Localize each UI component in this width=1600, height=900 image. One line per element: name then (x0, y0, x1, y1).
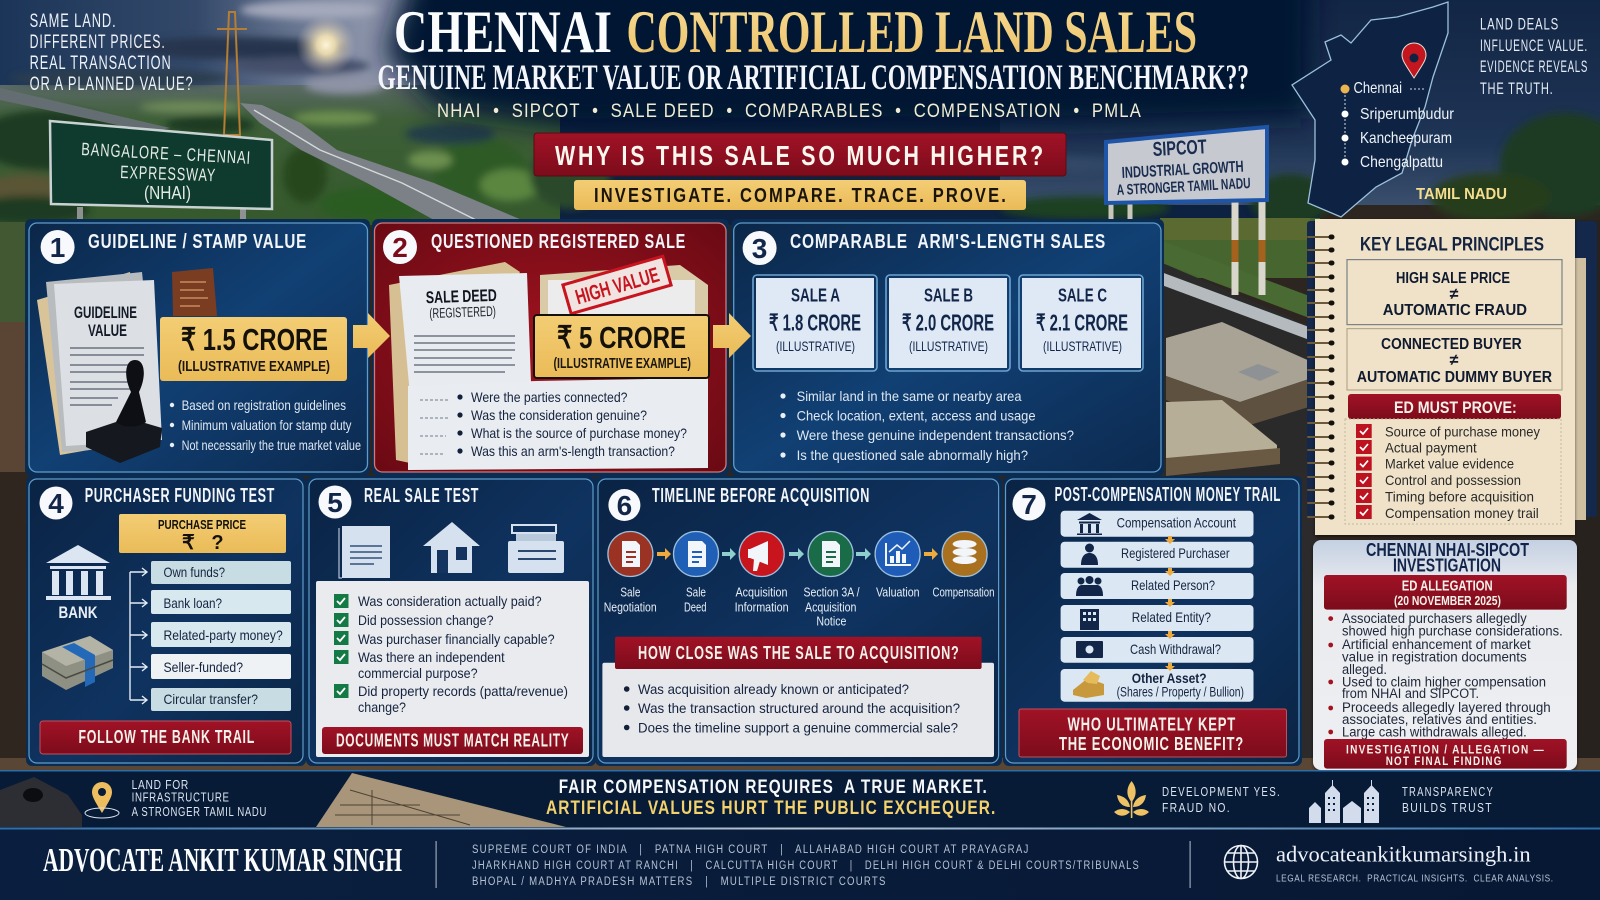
SIPCOT sign: INDUSTRIAL GROWTH (1121, 159, 1244, 182)
number badge 6 (608, 489, 640, 521)
back sheets (389, 262, 520, 463)
economic benefit banner (1019, 709, 1286, 757)
map labels: Chengalpattu (1360, 154, 1443, 171)
footer divider line (0, 828, 1600, 830)
advocate name: ADVOCATE ANKIT KUMAR SINGH (43, 842, 402, 879)
map labels (1354, 80, 1455, 171)
bullet list 1: Based on registration guidelines (182, 397, 346, 413)
map pin (1402, 43, 1426, 78)
purchase price box: PURCHASE PRICE (158, 517, 246, 532)
allegation bullets: Proceeds allegedly layered through (1342, 700, 1551, 715)
icon: leaf sprig (1114, 781, 1149, 818)
card sale B: (ILLUSTRATIVE) (909, 338, 988, 354)
documents must match reality banner: DOCUMENTS MUST MATCH REALITY (336, 731, 569, 751)
timeline labels: Information (735, 600, 789, 615)
question sheet: What is the source of purchase money? (471, 425, 687, 441)
SIPCOT sign: A STRONGER TAMIL NADU (1116, 175, 1251, 199)
expressway road sign: EXPRESSWAY (120, 162, 216, 185)
panel 4: purchaser funding test (26, 476, 306, 766)
number badge 1: 1 (50, 232, 65, 263)
allegation bullets (1328, 611, 1563, 739)
court list (472, 844, 1140, 888)
follow the bank trail banner: FOLLOW THE BANK TRAIL (78, 727, 255, 747)
red question banner: WHY IS THIS SALE SO MUCH HIGHER? (555, 140, 1046, 171)
allegation bullets: alleged. (1342, 662, 1387, 677)
ED allegation banner: (20 NOVEMBER 2025) (1394, 593, 1501, 608)
how close banner: HOW CLOSE WAS THE SALE TO ACQUISITION? (638, 643, 960, 663)
icon: bank (46, 545, 111, 622)
top-right tagline: THE TRUTH. (1480, 79, 1554, 98)
follow the bank trail banner (40, 721, 291, 754)
funding options (151, 561, 291, 711)
court list: JHARKHAND HIGH COURT AT RANCHI | CALCUTTA HIGH COURT | DELHI HIGH COURT & DELHI COURTS/TRIBUNALS (472, 860, 1140, 872)
sale deed document (399, 273, 531, 395)
economic benefit banner: WHO ULTIMATELY KEPT (1068, 715, 1236, 735)
top-left tagline: REAL TRANSACTION (30, 53, 172, 74)
topic strip: NHAI • SIPCOT • SALE DEED • COMPARABLES • COMPENSATION • PMLA (437, 101, 1142, 122)
panel 5: real sale test (306, 476, 596, 766)
funding branch connector (130, 568, 147, 704)
icon: document (339, 526, 390, 578)
high value stamp (563, 256, 671, 314)
principle 1: HIGH SALE PRICE (1396, 270, 1510, 287)
panel: Chennai NHAI-SIPCOT investigation (1313, 540, 1577, 770)
icon: city skyline (1309, 780, 1379, 823)
trail labels: Related Entity? (1132, 609, 1211, 625)
icon: house (423, 522, 480, 573)
card sale C (1019, 275, 1143, 371)
fair compensation statement: FAIR COMPENSATION REQUIRES A TRUE MARKET. (559, 777, 988, 798)
timeline icons (622, 540, 977, 571)
court list: BHOPAL / MADHYA PRADESH MATTERS | MULTIPLE DISTRICT COURTS (472, 876, 887, 888)
number badge 4 (40, 486, 72, 520)
ED proof checklist: Source of purchase money (1385, 423, 1540, 439)
panel 7: post-compensation money trail (1003, 476, 1302, 766)
website: advocateankitkumarsingh.in (1276, 842, 1531, 867)
SIPCOT sign: SIPCOT (1152, 136, 1207, 161)
investigation heading (1366, 540, 1529, 575)
not final finding banner (1324, 739, 1567, 769)
principle 2 (1347, 329, 1562, 390)
barrier rail (1160, 278, 1316, 336)
land for infrastructure text: A STRONGER TAMIL NADU (132, 805, 267, 819)
gold value box 5 crore: (ILLUSTRATIVE EXAMPLE) (554, 355, 691, 372)
panel 3: comparable sales (731, 219, 1164, 476)
left and right gutter scenery (0, 222, 30, 322)
card sale A: ₹ 1.8 CRORE (769, 310, 861, 336)
card sale C: SALE C (1058, 286, 1107, 306)
trail labels: (Shares / Property / Bullion) (1117, 684, 1244, 700)
ED allegation banner: ED ALLEGATION (1402, 579, 1493, 595)
card sale C: (ILLUSTRATIVE) (1043, 338, 1122, 354)
heading 3: COMPARABLE ARM'S-LENGTH SALES (790, 231, 1106, 253)
top-left tagline (30, 11, 194, 95)
timeline circles (608, 532, 987, 576)
not final finding banner: NOT FINAL FINDING (1386, 754, 1503, 768)
timeline labels: Valuation (876, 585, 920, 600)
high value stamp: HIGH VALUE (573, 264, 662, 309)
allegation bullets: Used to claim higher compensation (1342, 674, 1546, 689)
how close banner (615, 637, 982, 669)
checklist sheet: Was consideration actually paid? (358, 593, 542, 609)
trail labels: Other Asset? (1132, 670, 1207, 686)
guideline value document stack: GUIDELINE (74, 303, 137, 322)
transparency text: TRANSPARENCY (1402, 784, 1494, 799)
funding options: Bank loan? (164, 595, 222, 611)
Tamil Nadu map (1292, 2, 1507, 217)
timeline labels: Acquisition (736, 585, 788, 600)
footer branding band (0, 830, 1600, 900)
top-left tagline: SAME LAND. (30, 11, 117, 32)
principle 1 (1347, 260, 1562, 325)
investigation heading: CHENNAI NHAI-SIPCOT (1366, 540, 1529, 560)
header title: CONTROLLED LAND SALES (626, 0, 1197, 65)
sale deed document: SALE DEED (425, 286, 497, 307)
ED proof checklist: Compensation money trail (1385, 505, 1539, 521)
principle 2: CONNECTED BUYER (1381, 336, 1522, 353)
icon: cash stacks (42, 636, 113, 690)
bullet list 1: Minimum valuation for stamp duty (182, 417, 352, 433)
court list: SUPREME COURT OF INDIA | PATNA HIGH COURT | ALLAHABAD HIGH COURT AT PRAYAGRAJ (472, 844, 1030, 856)
funding options: Circular transfer? (164, 691, 258, 707)
ED proof checklist (1345, 419, 1561, 524)
question sheet: Were the parties connected? (471, 389, 628, 405)
notebook: key legal principles (1307, 219, 1597, 535)
checklist sheet: Did possession change? (358, 612, 494, 628)
trail down arrows (1165, 536, 1175, 671)
icon: globe (1224, 846, 1258, 878)
sign posts (1235, 200, 1262, 295)
ED allegation banner (1324, 575, 1567, 610)
trail labels (1117, 515, 1244, 700)
top-left tagline: DIFFERENT PRICES. (30, 32, 166, 53)
bullet list 1: Not necessarily the true market value (182, 437, 361, 453)
pylon tower (217, 12, 247, 135)
expressway road sign (50, 121, 272, 220)
heading 2: QUESTIONED REGISTERED SALE (431, 231, 686, 253)
top-right tagline (1480, 14, 1588, 98)
transparency text (1402, 784, 1494, 815)
acquisition questions sheet: Was the transaction structured around the acquisition? (638, 700, 960, 716)
SIPCOT sign (1106, 127, 1267, 222)
expressway road sign: BANGALORE – CHENNAI (81, 139, 252, 168)
camera-like desk object (0, 777, 82, 827)
land for infrastructure text (132, 778, 267, 819)
fair compensation statement (546, 777, 996, 819)
card sale B (886, 275, 1010, 371)
expressway road sign: (NHAI) (144, 183, 191, 203)
heading 7: POST-COMPENSATION MONEY TRAIL (1055, 484, 1281, 506)
allegation bullets: showed high purchase considerations. (1342, 624, 1563, 639)
bullet list 3 (780, 388, 1074, 463)
card sale A: SALE A (791, 286, 840, 306)
economic benefit banner: THE ECONOMIC BENEFIT? (1059, 734, 1244, 754)
icon: records box (508, 525, 564, 573)
ED proof checklist: Market value evidence (1385, 456, 1514, 472)
development text (1162, 784, 1281, 815)
timeline labels: Sale (620, 585, 640, 600)
ED proof checklist: Actual payment (1385, 440, 1477, 456)
rubber stamp (86, 360, 162, 463)
survey map sheet (316, 773, 566, 827)
trail labels: Cash Withdrawal? (1130, 641, 1221, 657)
bullet list 3: Were these genuine independent transactions? (797, 427, 1074, 443)
dark header haze (385, 0, 1310, 128)
checklist sheet: Was purchaser financially capable? (358, 631, 555, 647)
guideline value document stack: VALUE (88, 321, 127, 340)
trail labels: Registered Purchaser (1121, 545, 1230, 561)
acquisition questions sheet (602, 663, 994, 757)
land for infrastructure text: INFRASTRUCTURE (132, 791, 230, 805)
trail labels: Related Person? (1131, 577, 1215, 593)
not final finding banner: INVESTIGATION / ALLEGATION — (1346, 743, 1545, 757)
notebook heading: KEY LEGAL PRINCIPLES (1360, 235, 1544, 256)
right deed sheet (548, 280, 695, 322)
checklist sheet (316, 581, 589, 757)
checklist sheet: commercial purpose? (358, 665, 478, 681)
gold value box 5 crore (534, 315, 709, 378)
ED must prove banner: ED MUST PROVE: (1394, 398, 1517, 417)
header title: CHENNAI (394, 0, 612, 65)
gold value box 1.5 crore: ₹ 1.5 CRORE (181, 322, 328, 357)
timeline labels: Deed (684, 600, 706, 615)
timeline labels: Acquisition (805, 600, 856, 615)
card sale A: (ILLUSTRATIVE) (776, 338, 855, 354)
development text: FRAUD NO. (1162, 800, 1231, 815)
Tamil Nadu map: TAMIL NADU (1416, 186, 1507, 203)
number badge 5: 5 (327, 487, 343, 518)
development text: DEVELOPMENT YES. (1162, 784, 1281, 799)
top-left tagline: OR A PLANNED VALUE? (30, 74, 194, 95)
gold action banner: INVESTIGATE. COMPARE. TRACE. PROVE. (594, 185, 1008, 207)
number badge 6: 6 (617, 490, 632, 521)
panel 6: timeline before acquisition (595, 476, 1002, 766)
checklist sheet: Was there an independent (358, 649, 505, 665)
purchase price box: ₹ ? (182, 532, 224, 554)
bullet list 3: Check location, extent, access and usage (797, 408, 1036, 424)
documents must match reality banner (322, 727, 583, 754)
timeline labels: Notice (816, 614, 846, 629)
principle 1: AUTOMATIC FRAUD (1383, 302, 1527, 319)
number badge 3: 3 (752, 233, 767, 264)
number badge 2: 2 (392, 232, 408, 263)
checklist sheet: change? (358, 699, 406, 715)
trail icons (1073, 513, 1104, 698)
footer message strip (0, 770, 1600, 828)
timeline labels: Section 3A / (804, 585, 860, 600)
land for infrastructure text: LAND FOR (132, 778, 189, 792)
allegation bullets: associates, relatives and entities. (1342, 712, 1537, 727)
number badge 2 (383, 230, 417, 264)
bullet list 3: Similar land in the same or nearby area (797, 388, 1022, 404)
fair compensation statement: ARTIFICIAL VALUES HURT THE PUBLIC EXCHEQUER. (546, 798, 996, 819)
timeline labels: Compensation (932, 585, 994, 600)
number badge 7: 7 (1021, 489, 1037, 520)
map labels: Kancheepuram (1360, 130, 1452, 147)
heading 5: REAL SALE TEST (364, 485, 479, 507)
website (1276, 842, 1554, 885)
arrow from panel 1 to panel 2 (353, 313, 390, 358)
principle 1: ≠ (1450, 286, 1459, 303)
acquisition questions sheet: Does the timeline support a genuine commercial sale? (638, 720, 958, 736)
heading 4: PURCHASER FUNDING TEST (85, 485, 275, 507)
allegation bullets: Artificial enhancement of market (1342, 637, 1531, 652)
acquisition questions sheet: Was acquisition already known or anticipated? (638, 681, 909, 697)
sun (296, 15, 356, 75)
timeline labels: Negotiation (604, 600, 657, 615)
number badge 1 (41, 230, 75, 264)
principle 2: ≠ (1450, 352, 1459, 369)
stacked survey plans with bullion (1166, 322, 1312, 402)
ED proof checklist: Timing before acquisition (1385, 488, 1534, 504)
heading 1: GUIDELINE / STAMP VALUE (88, 231, 307, 253)
funding options: Own funds? (164, 564, 225, 580)
map labels: Chennai (1354, 80, 1402, 97)
question sheet (408, 378, 708, 470)
icon: location pin (85, 782, 119, 818)
icon: bank: BANK (58, 603, 98, 622)
trail labels: Compensation Account (1117, 515, 1236, 531)
number badge 3 (743, 231, 777, 265)
gold value box 1.5 crore (160, 317, 347, 381)
bullet list 3: Is the questioned sale abnormally high? (797, 447, 1028, 463)
investigation heading: INVESTIGATION (1393, 555, 1501, 575)
purchase price box (119, 514, 286, 554)
gold value box 1.5 crore: (ILLUSTRATIVE EXAMPLE) (178, 358, 330, 375)
top-right tagline: LAND DEALS (1480, 14, 1559, 34)
question sheet: Was this an arm's-length transaction? (471, 443, 675, 459)
money trail boxes (1061, 511, 1254, 702)
expressway road (240, 103, 522, 220)
ED must prove banner (1348, 394, 1561, 419)
spiral binding (1308, 237, 1333, 517)
funding options: Seller-funded? (164, 659, 243, 675)
timeline labels: Sale (686, 585, 706, 600)
number badge 7 (1012, 488, 1046, 520)
allegation bullets: Associated purchasers allegedly (1342, 611, 1527, 626)
panel 2: questioned registered sale (372, 219, 729, 476)
sale deed document: (REGISTERED) (429, 303, 496, 321)
map labels: Sriperumbudur (1360, 106, 1455, 123)
transparency text: BUILDS TRUST (1402, 800, 1493, 815)
principle 2: AUTOMATIC DUMMY BUYER (1357, 369, 1552, 386)
timeline arrows (657, 548, 938, 560)
funding options: Related-party money? (164, 627, 283, 643)
card sale B: ₹ 2.0 CRORE (902, 310, 994, 336)
arrow from panel 2 to panel 3 (713, 313, 751, 358)
timeline labels (604, 585, 994, 629)
brown ledger (172, 268, 217, 316)
question sheet: Was the consideration genuine? (471, 407, 647, 423)
allegation bullets: value in registration documents (1342, 649, 1527, 664)
gold action banner (574, 180, 1026, 210)
checklist sheet: Did property records (patta/revenue) (358, 683, 568, 699)
card sale B: SALE B (924, 286, 973, 306)
ED proof checklist: Control and possession (1385, 472, 1521, 488)
card sale A (753, 275, 877, 371)
allegation bullets: from NHAI and SIPCOT. (1342, 686, 1479, 701)
card sale C: ₹ 2.1 CRORE (1036, 310, 1128, 336)
bullet list 1 (170, 397, 361, 453)
panel 1: guideline stamp value (25, 219, 370, 476)
number badge 5 (318, 486, 352, 518)
guideline value document stack (37, 272, 162, 455)
allegation bullets: Large cash withdrawals alleged. (1342, 724, 1527, 739)
gold value box 5 crore: ₹ 5 CRORE (557, 320, 686, 355)
header title (394, 0, 1197, 65)
heading 6: TIMELINE BEFORE ACQUISITION (652, 485, 870, 507)
red question banner (534, 133, 1066, 176)
number badge 4: 4 (48, 488, 64, 519)
